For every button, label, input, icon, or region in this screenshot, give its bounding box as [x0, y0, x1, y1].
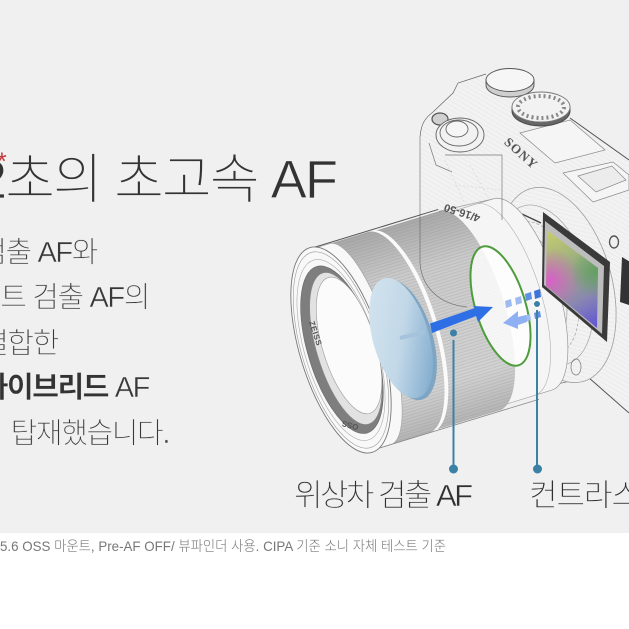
lens front: [271, 236, 411, 464]
blue optical element: [357, 271, 449, 407]
lens barrel: [310, 183, 588, 450]
arrow: reflected light: [503, 311, 527, 329]
body text: [0, 237, 169, 450]
sensor focus points: [505, 289, 541, 322]
lens markings: ZEISS: [307, 320, 324, 347]
top dial: [486, 68, 534, 97]
shutter button: [432, 113, 484, 152]
camera illustration: [271, 68, 629, 464]
lens markings: 4/16-50: [443, 201, 482, 224]
lens mount: [478, 174, 629, 396]
mode dial: [512, 92, 570, 126]
callout: contrast detection AF: [529, 300, 629, 513]
lens markings: OSS: [340, 419, 360, 432]
brand: SONY: [501, 134, 541, 172]
contrast AF ellipse: [458, 239, 543, 373]
rear panel block: [610, 236, 629, 306]
camera body: [420, 74, 629, 425]
body text: 탑재했습니다.: [11, 418, 169, 450]
image sensor: [542, 212, 610, 342]
callout: phase detection AF: 위상차 검출 AF: [294, 478, 473, 513]
lens markings: [307, 201, 482, 432]
footnote: 5.6 OSS 마운트, Pre-AF OFF/ 뷰파인더 사용. CIPA 기준 소니 자체 테스트 기준: [0, 538, 446, 554]
grip outline: [420, 137, 502, 307]
callout: phase detection AF: [294, 330, 473, 513]
arrow: incoming light: [430, 306, 493, 333]
